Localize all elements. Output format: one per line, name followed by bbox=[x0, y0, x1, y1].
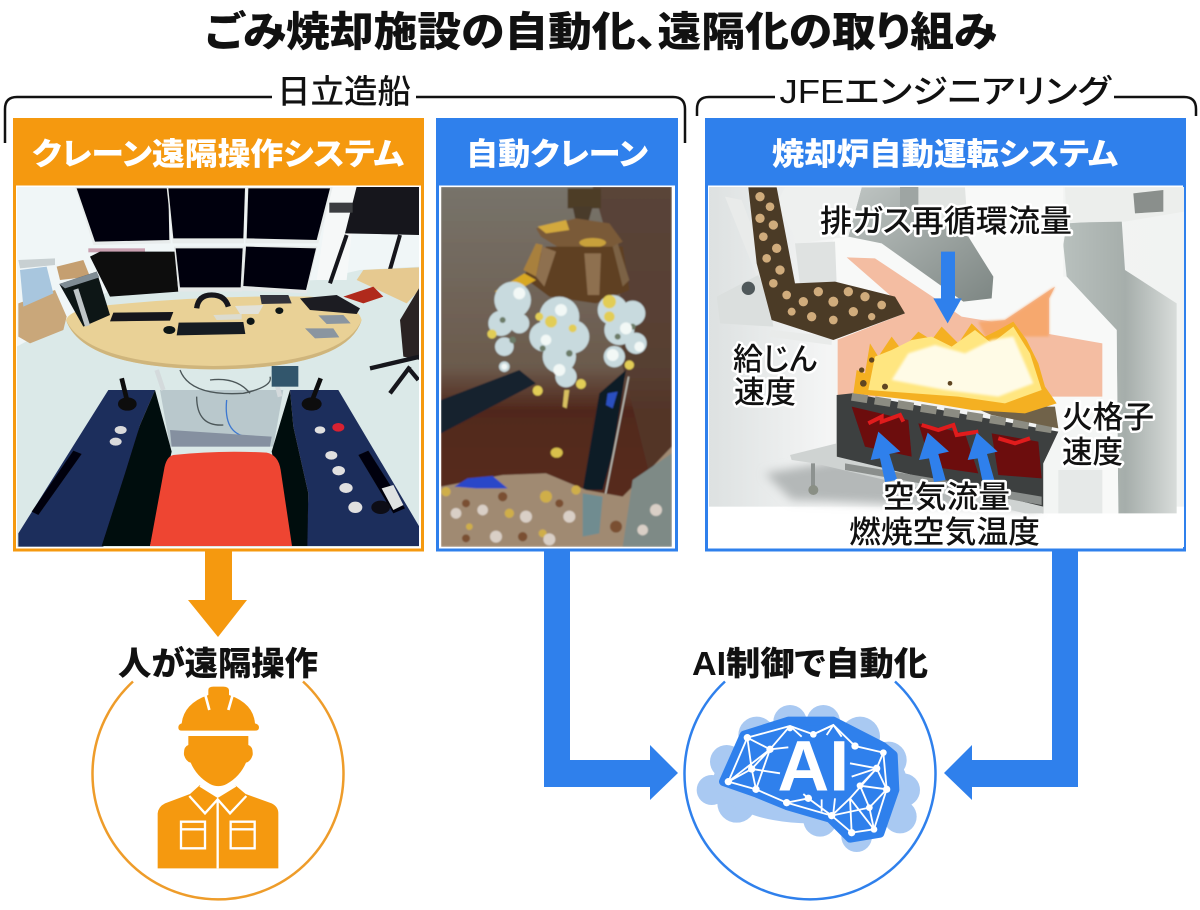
panel: 自動クレーン bbox=[436, 118, 678, 550]
brick wall bbox=[837, 257, 1102, 397]
label: 給じん速度: 給じん bbox=[733, 342, 817, 377]
label: 火格子速度: 火格子 bbox=[1062, 400, 1154, 435]
bracket group: 日立造船: 日立造船 bbox=[277, 73, 411, 110]
panel header bbox=[705, 118, 1186, 184]
icon: AI brain bbox=[697, 705, 920, 852]
label: 排ガス再循環流量: 排ガス再循環流量 bbox=[820, 204, 1072, 239]
label: 火格子速度 bbox=[1062, 400, 1154, 470]
keyboards and desk items bbox=[110, 312, 173, 321]
bracket group: JFEエンジニアリング: JFEエンジニアリング bbox=[780, 73, 1112, 110]
illustration: incinerator bbox=[709, 187, 1184, 550]
PC tower bbox=[59, 272, 110, 327]
panel frame bbox=[14, 184, 422, 550]
panel: クレーン遠隔操作システム bbox=[13, 118, 424, 550]
red zigzag frames bbox=[852, 407, 1042, 478]
cloud bbox=[697, 705, 920, 852]
cables and stand bbox=[157, 370, 280, 397]
grate interior bbox=[837, 393, 1058, 513]
panel header bbox=[436, 118, 678, 184]
header label: クレーン遠隔操作システム bbox=[32, 137, 404, 172]
panel frame bbox=[438, 184, 676, 550]
arrow: orange down bbox=[188, 551, 247, 637]
arrow: air up 3 bbox=[968, 433, 998, 482]
panel frame bbox=[706, 184, 1184, 550]
title: ごみ焼却施設の自動化、遠隔化の取り組み bbox=[205, 9, 997, 55]
header label: 自動クレーン bbox=[466, 137, 648, 172]
base frame bbox=[790, 443, 1043, 513]
label: 空気流量 燃焼空気温度: 空気流量 bbox=[883, 480, 1010, 515]
AI lettering: AI bbox=[778, 727, 849, 807]
heading: AI制御で自動化: AI制御で自動化 bbox=[692, 645, 928, 682]
flames bbox=[853, 322, 1057, 413]
photo: control room bbox=[17, 187, 420, 548]
right wall display and cart bbox=[345, 187, 419, 235]
label: 給じん速度: 速度 bbox=[734, 375, 796, 410]
heading: 人が遠隔操作: 人が遠隔操作 bbox=[118, 645, 318, 682]
garbage clumps bbox=[488, 282, 647, 387]
arrow: exhaust gas down bbox=[933, 252, 962, 323]
pile bbox=[441, 447, 672, 547]
panel header bbox=[13, 118, 424, 184]
grab body bbox=[568, 188, 601, 208]
brain silhouette bbox=[723, 721, 895, 838]
label: 空気流量 燃焼空気温度: 燃焼空気温度 bbox=[849, 515, 1040, 550]
bracket group: JFEエンジニアリング bbox=[697, 73, 1196, 116]
left console bbox=[18, 390, 155, 547]
arrow: air up 1 bbox=[871, 432, 900, 482]
hood bbox=[848, 187, 993, 302]
bracket group: 日立造船 bbox=[5, 73, 685, 143]
circle: blue bbox=[684, 682, 936, 899]
photo: crane grab bbox=[441, 187, 672, 547]
monitors bbox=[75, 187, 171, 245]
front wall right bbox=[1043, 454, 1048, 514]
arrow: blue to AI from right bbox=[944, 551, 1078, 800]
label: 給じん速度 bbox=[733, 342, 817, 410]
waste chute bbox=[748, 187, 905, 340]
chair seat bbox=[150, 452, 292, 546]
label: 空気流量 燃焼空気温度 bbox=[849, 480, 1040, 550]
table bbox=[66, 296, 362, 369]
arrow: air up 2 bbox=[919, 433, 949, 482]
panel: 焼却炉自動運転システム bbox=[705, 118, 1186, 550]
boxes bbox=[18, 290, 67, 343]
header label: 焼却炉自動運転システム bbox=[772, 137, 1118, 172]
arrow: blue to AI from left bbox=[544, 551, 678, 800]
icon: worker with helmet bbox=[158, 687, 278, 868]
label: 火格子速度: 速度 bbox=[1062, 435, 1123, 470]
network bbox=[728, 725, 887, 833]
right console bbox=[290, 390, 419, 546]
left wall below hopper bbox=[832, 340, 838, 396]
right duct bbox=[1063, 220, 1177, 513]
white structure bbox=[1063, 244, 1118, 513]
circle: orange bbox=[93, 682, 344, 899]
hopper bbox=[834, 188, 862, 238]
